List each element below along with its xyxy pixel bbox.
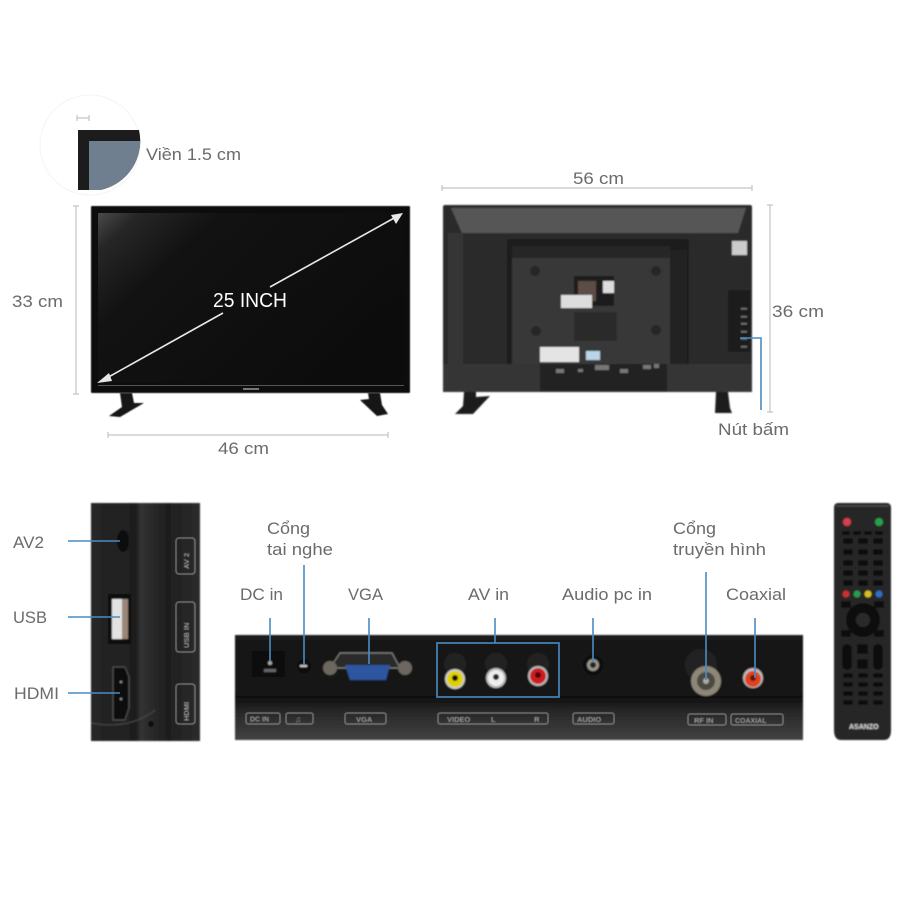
colour buttons	[842, 590, 850, 598]
side port printed labels	[176, 538, 195, 724]
back centre block	[507, 239, 689, 365]
lower shell band	[443, 364, 752, 392]
dimension: height front	[12, 206, 79, 394]
button rows	[841, 531, 884, 705]
VESA screws	[530, 266, 661, 336]
RCA red	[527, 653, 549, 675]
callout: Audio pc in	[562, 585, 652, 662]
rear printed labels	[246, 713, 783, 725]
callout: DC in: DC in	[240, 585, 283, 604]
rear printed labels: VGA	[356, 715, 373, 724]
callout: AV2: AV2	[13, 533, 44, 552]
callout: DC in	[240, 585, 283, 661]
callout: headphone: tai nghe	[267, 540, 333, 559]
side button panel	[728, 290, 750, 352]
bezel label: Viền 1.5 cm	[146, 145, 241, 164]
callout: HDMI: HDMI	[14, 684, 59, 703]
back shell	[443, 205, 752, 392]
audio jack	[583, 655, 603, 675]
AV2 jack	[117, 530, 129, 552]
rear printed labels: DC IN	[250, 716, 269, 724]
callout: antenna: truyền hình	[673, 540, 766, 559]
side port printed labels: AV 2	[182, 553, 191, 569]
callout: AV2	[13, 533, 120, 552]
callout: antenna	[673, 519, 766, 680]
remote control	[834, 503, 891, 740]
back view TV	[443, 205, 752, 414]
rear printed labels: R	[534, 715, 540, 724]
diagonal size arrow	[97, 213, 403, 383]
callout: headphone: Cổng	[267, 519, 310, 538]
callout: AV in	[437, 585, 559, 697]
rear printed labels: COAXIAL	[735, 718, 767, 725]
dimension: width front: 46 cm	[218, 439, 269, 458]
side panel photo	[91, 503, 200, 741]
TV stands back	[455, 392, 490, 414]
TV frame front	[91, 206, 410, 393]
dimension: width front	[108, 432, 388, 458]
rear printed labels: RF IN	[694, 716, 714, 725]
back stickers	[574, 276, 614, 306]
DC in port	[252, 651, 285, 677]
callout: headphone	[267, 519, 333, 665]
bezel corner image	[78, 130, 140, 190]
side port printed labels: USB IN	[182, 623, 191, 648]
front view TV	[91, 206, 410, 417]
rear printed labels: AUDIO	[577, 715, 601, 724]
callout: VGA	[348, 585, 384, 664]
TV screen	[98, 213, 404, 383]
callout: VGA: VGA	[348, 585, 384, 604]
TV stands front	[109, 393, 388, 417]
dimension: height back	[767, 205, 824, 412]
callout: Coaxial: Coaxial	[726, 585, 786, 604]
callout: AV in: AV in	[468, 585, 509, 604]
headphone port	[297, 659, 311, 673]
callout: Audio pc in: Audio pc in	[562, 585, 652, 604]
callout: USB	[13, 608, 120, 627]
rear panel photo	[235, 635, 803, 740]
side port printed labels: HDMI	[182, 702, 191, 721]
rear printed labels: VIDEO	[447, 715, 471, 724]
d-pad	[846, 603, 880, 637]
dimension: width back	[442, 169, 752, 191]
callout: antenna: Cổng	[673, 519, 716, 538]
remote brand: ASANZO	[849, 724, 879, 731]
button callout	[718, 338, 789, 439]
USB port	[108, 594, 131, 644]
bezel width tick	[77, 115, 89, 121]
ports row back	[556, 364, 659, 373]
panel: side ports	[91, 503, 200, 741]
dimension: height front: 33 cm	[12, 292, 63, 311]
VGA port	[330, 653, 400, 668]
callout: USB: USB	[13, 608, 47, 627]
RCA yellow	[444, 653, 466, 675]
screen size label: 25 INCH	[213, 290, 287, 312]
callout: HDMI	[14, 684, 120, 703]
rear printed labels: ♫	[295, 715, 301, 724]
dimension: width back: 56 cm	[573, 169, 624, 188]
dimension: height back: 36 cm	[772, 302, 824, 321]
coaxial port	[739, 651, 761, 673]
rear printed labels: L	[491, 715, 496, 724]
panel: rear ports	[235, 635, 803, 740]
RF connector	[685, 649, 717, 681]
power and source buttons	[843, 518, 851, 526]
RCA white	[485, 653, 507, 675]
HDMI port	[113, 667, 129, 720]
button callout: Nút bấm	[718, 420, 789, 439]
callout: Coaxial	[726, 585, 786, 678]
bezel detail inset	[40, 94, 140, 196]
